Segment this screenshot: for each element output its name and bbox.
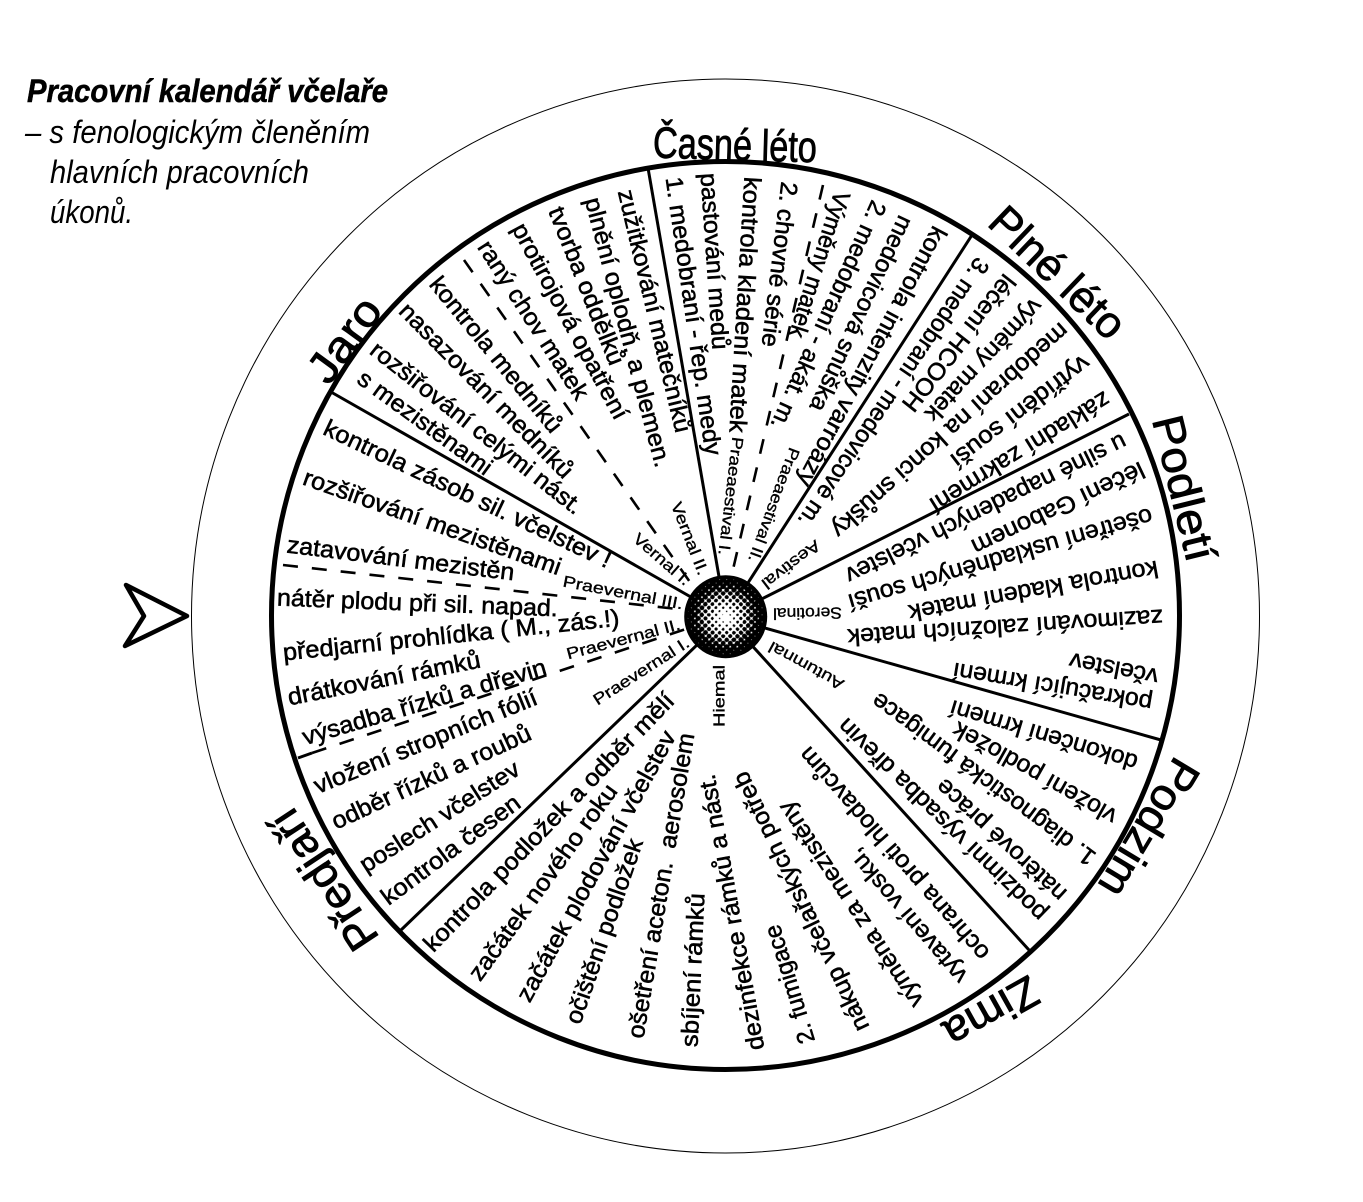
task: základní zakrmení bbox=[924, 386, 1115, 519]
task: ošetření uskladněných souší bbox=[844, 502, 1156, 616]
label: Praevernal I: Praevernal I. bbox=[590, 635, 693, 709]
panel: Jaro tasks bbox=[352, 187, 696, 520]
subtitle line 2: hlavních pracovních bbox=[50, 154, 309, 190]
task: podzimní výsadba dřevin bbox=[833, 712, 1052, 927]
task: s mezistěnami bbox=[352, 365, 497, 481]
heading: Zima: Zima bbox=[935, 966, 1048, 1058]
heading: Podletí: Podletí bbox=[1142, 410, 1226, 567]
task: poslech včelstev bbox=[355, 756, 525, 878]
label: Hiemal: Hiemal bbox=[712, 665, 728, 727]
heading: Jaro: Jaro bbox=[297, 288, 392, 392]
task: pokračující krmení bbox=[950, 657, 1154, 716]
task: vytavení vosku, bbox=[843, 843, 973, 989]
task: ošetření aceton. aerosolem bbox=[623, 731, 700, 1040]
label: Praeaestival I: Praeaestival I. bbox=[714, 436, 745, 556]
heading: Časné léto: Časné léto bbox=[652, 118, 818, 172]
task: výsadba řízků a dřevin bbox=[299, 654, 550, 751]
phenological phase labels bbox=[561, 436, 847, 727]
task: Výměny matek bbox=[783, 188, 855, 342]
panel: Zima tasks bbox=[418, 687, 995, 1052]
panel: Předjaří tasks bbox=[276, 415, 621, 911]
panel: Podletí tasks bbox=[841, 428, 1164, 716]
task: 2. medobraní - akát. m. bbox=[765, 196, 891, 434]
heading: Podzim: Podzim bbox=[1088, 749, 1209, 906]
season headings bbox=[259, 118, 1226, 1058]
icon: pointer arrow bbox=[125, 585, 187, 646]
task: zazimování založních matek bbox=[846, 604, 1164, 650]
task: 3. medobraní - medovicové m. bbox=[792, 252, 994, 532]
task: nátěr plodu při sil. napad. bbox=[276, 585, 558, 622]
task: začátek plodování včelstev bbox=[511, 726, 682, 1007]
task: plnění oplodň, a plemen. bbox=[579, 195, 676, 470]
label: Vernal II: Vernal II. bbox=[667, 500, 711, 578]
task: ochrana proti hlodavcům bbox=[794, 741, 995, 966]
task: pastování medů bbox=[695, 172, 734, 351]
task: medovicová snůška bbox=[803, 211, 918, 416]
dashed phenological dividers bbox=[283, 185, 823, 753]
task: výměna za mezistěny bbox=[773, 796, 929, 1012]
task: kontrola kladení matek bbox=[723, 176, 765, 434]
task: nasazování medníků bbox=[393, 298, 579, 484]
label: Praevernal II: Praevernal II. bbox=[565, 617, 682, 663]
label: Aestival: Aestival bbox=[758, 536, 823, 592]
heading: Předjaří: Předjaří bbox=[259, 798, 388, 960]
task: kontrola podložek a odběr mělí bbox=[418, 687, 680, 957]
task: dezinfekce rámků a nást. bbox=[694, 772, 770, 1052]
task: 1. medobraní - řep. medy bbox=[660, 175, 726, 457]
heading: Plné léto: Plné léto bbox=[979, 196, 1136, 349]
sector spokes bbox=[298, 168, 1161, 950]
task: drátkování rámků bbox=[285, 647, 483, 711]
task: vložení stropních fólií bbox=[310, 684, 542, 799]
task: předjarní prohlídka ( M., zás.!) bbox=[282, 605, 621, 666]
subtitle line 1: – s fenologickým členěním bbox=[24, 114, 370, 150]
task: vložení podložek bbox=[947, 715, 1122, 830]
label: Vernal I: Vernal I. bbox=[629, 531, 693, 589]
task: nákup včelařských potřeb bbox=[728, 767, 875, 1036]
title block bbox=[24, 73, 388, 230]
task: kontrola intenzity varroázy bbox=[791, 222, 952, 491]
outer thin circle bbox=[192, 79, 1260, 1153]
task: rozšiřování mezistěnami bbox=[299, 464, 565, 581]
task: výměny matek bbox=[919, 293, 1048, 428]
task: začátek nového roku bbox=[463, 779, 623, 986]
task: odběr řízků a roubů bbox=[327, 720, 536, 835]
task: kontrola zásob sil. včelstev ! bbox=[319, 415, 616, 574]
subtitle line 3: úkonů. bbox=[50, 194, 133, 230]
task: včelstev bbox=[1067, 647, 1161, 690]
task: vytřídění souší bbox=[944, 349, 1095, 474]
task: léčení Gabonem bbox=[967, 456, 1149, 560]
task: očištění podložek bbox=[560, 834, 649, 1027]
central hub sphere bbox=[684, 575, 767, 658]
task: tvorba oddělků bbox=[542, 203, 630, 369]
label: Praevernal III: Praevernal III. bbox=[561, 574, 684, 613]
title: Pracovní kalendář včelaře bbox=[27, 73, 388, 109]
task: kontrola česen bbox=[376, 789, 526, 911]
inner wheel circle bbox=[272, 162, 1180, 1070]
task: rozšiřování celými nást. bbox=[365, 336, 588, 520]
task: zatavování mezistěn bbox=[285, 532, 516, 586]
task: u silné napadených včelstev bbox=[841, 428, 1131, 589]
task: nátěrové práce bbox=[931, 773, 1072, 907]
task: zužitkování matečníků bbox=[612, 187, 696, 435]
task: kontrola kladení matek bbox=[906, 555, 1160, 626]
task: protirojová opatření bbox=[506, 219, 634, 425]
panel: Plné léto tasks bbox=[792, 252, 1115, 543]
label: Praeaestival II: Praeaestival II. bbox=[744, 445, 802, 564]
label: Serotinal: Serotinal bbox=[773, 604, 842, 621]
task: kontrola medníků bbox=[424, 271, 568, 438]
panel: Časné léto tasks bbox=[660, 172, 952, 491]
task: léčení HCOOH bbox=[896, 269, 1021, 417]
task: 2. fumigace bbox=[759, 921, 821, 1047]
task: 2. chovné série bbox=[756, 180, 802, 348]
panel: Podzim tasks bbox=[833, 687, 1141, 927]
task: dokončení krmení bbox=[946, 694, 1141, 776]
task: medobraní na konci snůšky bbox=[826, 317, 1074, 543]
task: 1. diagnostická fumigace bbox=[867, 687, 1101, 871]
task: raný chov matek bbox=[472, 236, 595, 406]
task: sbíjení rámků bbox=[677, 893, 710, 1048]
label: Autumnal: Autumnal bbox=[766, 638, 847, 692]
